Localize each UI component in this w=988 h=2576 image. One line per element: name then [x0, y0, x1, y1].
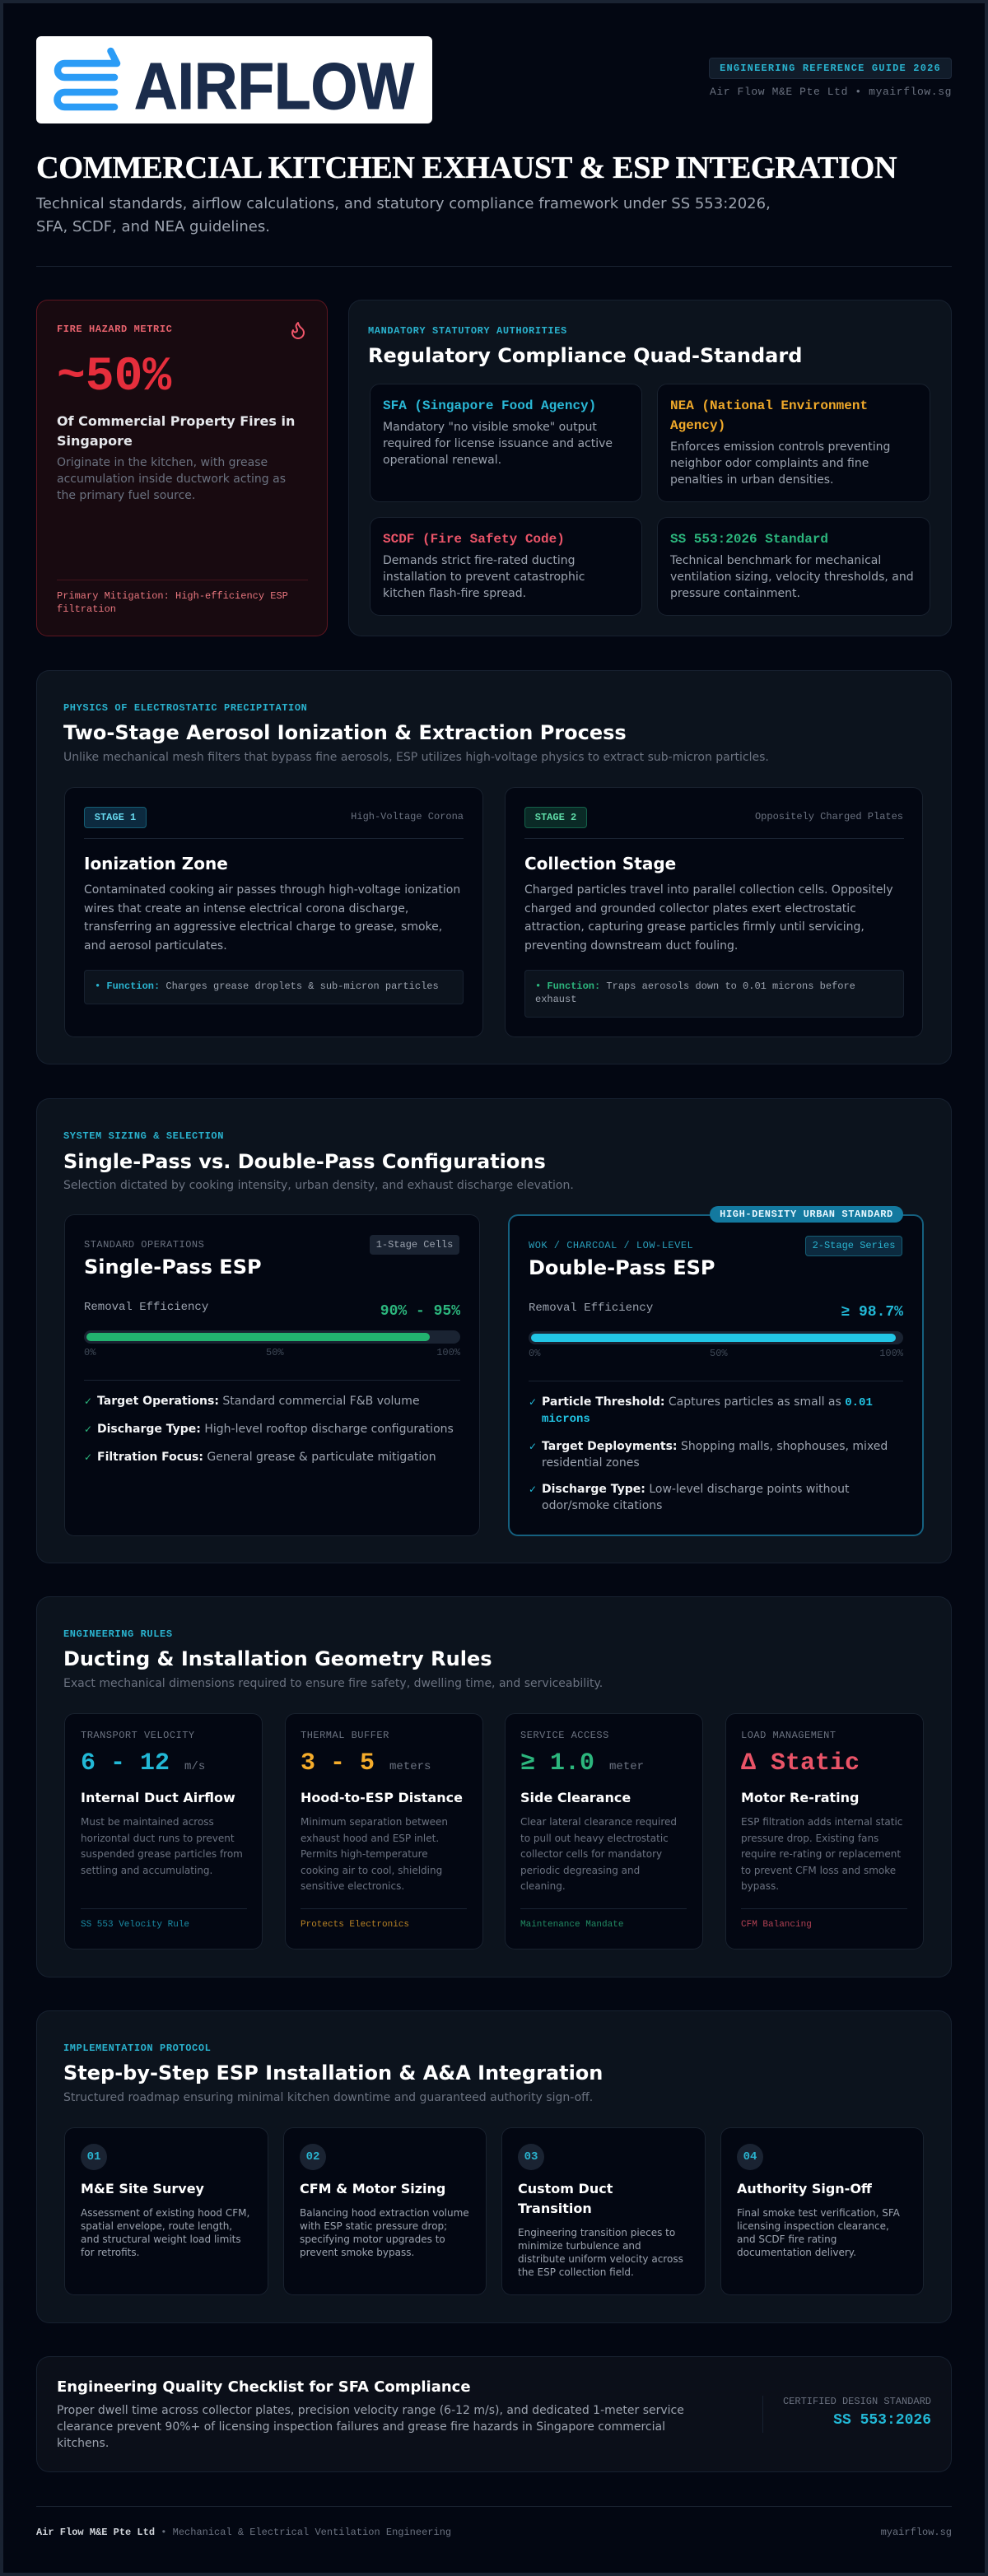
authority: NEA: penalties in urban densities. — [670, 473, 834, 487]
step 2: prevent smoke bypass. — [300, 2247, 414, 2258]
fire label: FIRE HAZARD METRIC — [57, 324, 172, 335]
badge — [370, 1235, 459, 1255]
efficiency bar — [529, 1331, 903, 1344]
rule: clearance: SERVICE ACCESS — [520, 1730, 609, 1741]
rule: motor: require re-rating or replacement — [741, 1848, 901, 1860]
big metric: ~50% — [57, 351, 171, 404]
rule: velocity — [64, 1713, 263, 1949]
section heading: Two-Stage Aerosol Ionization & Extraction Process — [63, 721, 627, 744]
rule: velocity: settling and accumulating. — [81, 1864, 212, 1875]
stage 2 card: preventing downstream duct fouling. — [524, 939, 738, 953]
step 1: Assessment of existing hood CFM, — [81, 2207, 249, 2219]
rule: motor: LOAD MANAGEMENT — [741, 1730, 837, 1741]
panel: single vs double pass — [36, 1098, 952, 1563]
pill — [710, 1206, 903, 1223]
rule: clearance: Side Clearance — [520, 1790, 631, 1805]
stage 2 card: • Function: Traps aerosols down to 0.01 microns before — [535, 981, 855, 992]
checklist text: clearance prevent 90%+ of licensing inspection failures and grease fire hazards in Singapore commercial — [57, 2420, 665, 2434]
single-pass card: 100% — [436, 1347, 460, 1358]
authority: NEA: Agency) — [670, 418, 725, 433]
checklist text — [57, 2404, 684, 2450]
stage 1 card: • Function: Charges grease droplets & sub-micron particles — [95, 981, 439, 992]
single-pass card — [64, 1214, 480, 1536]
authority: SFA: operational renewal. — [383, 454, 501, 467]
authority: SS 553: pressure containment. — [670, 587, 800, 600]
rule: velocity: horizontal duct runs to prevent — [81, 1833, 235, 1844]
section label: MANDATORY STATUTORY AUTHORITIES — [368, 325, 567, 337]
step 2: CFM & Motor Sizing — [300, 2181, 445, 2196]
badge: 1-Stage Cells — [376, 1239, 453, 1251]
rule: motor: pressure drop. Existing fans — [741, 1833, 878, 1844]
step 2 — [283, 2127, 487, 2295]
stage 1 card: transferring an aggressive electrical charge to grease, smoke, — [84, 920, 442, 934]
footer left: Air Flow M&E Pte Ltd • Mechanical & Electrical Ventilation Engineering — [36, 2527, 451, 2538]
double-pass card: Discharge Type: Low-level discharge points without — [542, 1483, 849, 1496]
icon: flame — [291, 322, 305, 339]
single-pass card: Single-Pass ESP — [84, 1255, 262, 1279]
double-pass card: Particle Threshold: Captures particles as small as 0.01 — [542, 1395, 873, 1409]
double-pass card: ✓ — [529, 1441, 537, 1452]
single-pass card: 90% - 95% — [380, 1303, 460, 1320]
double-pass card: 0% — [529, 1348, 540, 1359]
rule: motor: CFM Balancing — [741, 1920, 812, 1930]
rule: buffer: exhaust hood and ESP inlet. — [301, 1833, 439, 1844]
single-pass card: 0% — [84, 1347, 96, 1358]
stage 2 card: charged and grounded collector plates exert electrostatic — [524, 902, 856, 915]
rule: buffer: Hood-to-ESP Distance — [301, 1790, 463, 1805]
panel: quality checklist — [36, 2356, 952, 2472]
authority: SFA: SFA (Singapore Food Agency) — [383, 398, 596, 413]
feature list: ✓ — [529, 1396, 537, 1408]
section label: SYSTEM SIZING & SELECTION — [63, 1130, 224, 1142]
rule: motor: Δ Static — [741, 1749, 860, 1777]
authority: SS 553 — [657, 517, 930, 616]
header badge: ENGINEERING REFERENCE GUIDE 2026 — [720, 63, 941, 74]
header badge — [709, 58, 952, 79]
rule: velocity: Must be maintained across — [81, 1816, 214, 1828]
step 1: 01 — [87, 2150, 100, 2164]
authority: SFA: Mandatory "no visible smoke" output — [383, 421, 597, 434]
metric heading: Of Commercial Property Fires in — [57, 413, 295, 429]
double-pass card: Target Deployments: Shopping malls, shophouses, mixed — [542, 1440, 888, 1453]
step 4: 04 — [743, 2150, 757, 2164]
authority: SCDF: kitchen flash-fire spread. — [383, 587, 526, 600]
section heading: Ducting & Installation Geometry Rules — [63, 1647, 492, 1670]
panel: implementation steps — [36, 2010, 952, 2323]
rule: clearance: Maintenance Mandate — [520, 1920, 623, 1930]
mitigation note: filtration — [57, 603, 116, 615]
badge — [805, 1236, 902, 1256]
rule: clearance: to pull out heavy electrostatic — [520, 1833, 669, 1844]
authority: NEA: neighbor odor complaints and fine — [670, 457, 869, 470]
double-pass card: microns — [542, 1413, 590, 1426]
step 1: spatial envelope, route length, — [81, 2220, 232, 2232]
stage 1 card: and aerosol particulates. — [84, 939, 227, 953]
step 4: documentation delivery. — [737, 2247, 856, 2258]
step 4: licensing inspection clearance, — [737, 2220, 889, 2232]
stage 2 card: Oppositely Charged Plates — [755, 811, 903, 822]
footer right: myairflow.sg — [881, 2527, 952, 2538]
stage 2 card: Charged particles travel into parallel collection cells. Oppositely — [524, 883, 893, 897]
section label: ENGINEERING RULES — [63, 1628, 173, 1640]
rule: velocity: 6 - 12 m/s — [81, 1749, 205, 1777]
stage 1 card: Contaminated cooking air passes through high-voltage ionization — [84, 883, 460, 897]
header company line: Air Flow M&E Pte Ltd • myairflow.sg — [710, 86, 952, 98]
double-pass card: Double-Pass ESP — [529, 1256, 715, 1279]
authority: SCDF: Demands strict fire-rated ducting — [383, 554, 575, 567]
stage 2 card: Collection Stage — [524, 854, 676, 873]
double-pass card: odor/smoke citations — [542, 1499, 662, 1512]
pill: HIGH-DENSITY URBAN STANDARD — [720, 1209, 893, 1220]
rule: clearance: collector cells for mandatory — [520, 1848, 662, 1860]
panel: regulatory compliance — [348, 300, 952, 636]
rule: velocity: suspended grease particles from — [81, 1848, 243, 1860]
step 1 — [64, 2127, 268, 2295]
checklist text: kitchens. — [57, 2437, 109, 2450]
rule: buffer: cooking air to cool, shielding — [301, 1864, 442, 1875]
authority: SCDF: SCDF (Fire Safety Code) — [383, 532, 565, 547]
step 3: minimize turbulence and — [518, 2240, 641, 2252]
stage 1 card — [64, 787, 483, 1037]
step 3: Transition — [518, 2201, 592, 2216]
double-pass card: 50% — [710, 1348, 728, 1359]
step 4 — [720, 2127, 924, 2295]
rule: motor: Motor Re-rating — [741, 1790, 860, 1805]
section description: Structured roadmap ensuring minimal kitchen downtime and guaranteed authority sign-off. — [63, 2091, 593, 2104]
single-pass card: 50% — [266, 1347, 284, 1358]
single-pass card: ✓ — [84, 1423, 92, 1435]
stage 2 card: exhaust — [535, 994, 576, 1005]
step 1: and structural weight load limits — [81, 2234, 241, 2245]
rule: clearance: periodic degreasing and — [520, 1864, 640, 1875]
step 3: 03 — [524, 2150, 538, 2164]
step 4: and SCDF fire rating — [737, 2234, 837, 2245]
double-pass card: Removal Efficiency — [529, 1302, 653, 1315]
subtitle: SFA, SCDF, and NEA guidelines. — [36, 218, 270, 235]
rule: buffer: THERMAL BUFFER — [301, 1730, 389, 1741]
step 4: Final smoke test verification, SFA — [737, 2207, 900, 2219]
double-pass card: residential zones — [542, 1456, 640, 1470]
rule: buffer — [285, 1713, 483, 1949]
subtitle — [36, 195, 771, 235]
single-pass card: ✓ — [84, 1451, 92, 1463]
step 4: Authority Sign-Off — [737, 2181, 872, 2196]
section label: PHYSICS OF ELECTROSTATIC PRECIPITATION — [63, 702, 307, 714]
efficiency bar — [84, 1330, 460, 1344]
stage 2 card: attraction, capturing grease particles firmly until servicing, — [524, 920, 864, 934]
double-pass card — [508, 1214, 924, 1536]
rule: motor — [725, 1713, 924, 1949]
single-pass card: Discharge Type: High-level rooftop discharge configurations — [97, 1423, 454, 1436]
step 3 — [501, 2127, 706, 2295]
section description: Selection dictated by cooking intensity, urban density, and exhaust discharge elevation. — [63, 1179, 574, 1192]
step 2: Balancing hood extraction volume — [300, 2207, 469, 2219]
double-pass card: ≥ 98.7% — [841, 1304, 903, 1321]
section label: IMPLEMENTATION PROTOCOL — [63, 2043, 211, 2054]
stage 1 card: High-Voltage Corona — [351, 811, 464, 822]
step 2: specifying motor upgrades to — [300, 2234, 445, 2245]
rule: velocity: SS 553 Velocity Rule — [81, 1920, 189, 1930]
metric description — [57, 456, 286, 502]
rule: velocity: TRANSPORT VELOCITY — [81, 1730, 195, 1741]
stage 1 card: Ionization Zone — [84, 854, 228, 873]
stage 1 card: wires that create an intense electrical corona discharge, — [84, 902, 408, 915]
step 2: 02 — [306, 2150, 319, 2164]
single-pass card: Removal Efficiency — [84, 1301, 208, 1314]
feature list: ✓ — [84, 1395, 92, 1407]
step 3: distribute uniform velocity across — [518, 2253, 683, 2265]
badge: 2-Stage Series — [813, 1240, 895, 1251]
rule: buffer: Permits high-temperature — [301, 1848, 428, 1860]
mitigation note — [57, 590, 288, 615]
logo — [36, 36, 432, 123]
authority: NEA: NEA (National Environment — [670, 398, 868, 413]
authority: SCDF — [370, 517, 642, 616]
metric description: accumulation inside ductwork acting as — [57, 473, 286, 486]
section heading: Step-by-Step ESP Installation & A&A Integration — [63, 2061, 603, 2085]
rule: buffer: sensitive electronics. — [301, 1880, 404, 1892]
double-pass card: 100% — [879, 1348, 903, 1359]
rule: buffer: Minimum separation between — [301, 1816, 448, 1828]
authority: SS 553: ventilation sizing, velocity thresholds, and — [670, 571, 914, 584]
metric description: Originate in the kitchen, with grease — [57, 456, 268, 469]
rule: buffer: Protects Electronics — [301, 1920, 409, 1930]
authority: SCDF: installation to prevent catastrophic — [383, 571, 585, 584]
rule: clearance: Clear lateral clearance required — [520, 1816, 677, 1828]
double-pass card: ✓ — [529, 1484, 537, 1495]
authority: SFA: required for license issuance and active — [383, 437, 613, 450]
panel: two-stage process — [36, 670, 952, 1064]
title: COMMERCIAL KITCHEN EXHAUST & ESP INTEGRATION — [36, 151, 897, 185]
section heading: Single-Pass vs. Double-Pass Configurations — [63, 1150, 546, 1173]
rule: clearance — [505, 1713, 703, 1949]
section description: Exact mechanical dimensions required to ensure fire safety, dwelling time, and serviceability. — [63, 1677, 603, 1690]
metric heading: Singapore — [57, 433, 133, 449]
authority: SFA — [370, 384, 642, 502]
step 3: the ESP collection field. — [518, 2266, 634, 2278]
rule: velocity: Internal Duct Airflow — [81, 1790, 235, 1805]
checklist heading: Engineering Quality Checklist for SFA Compliance — [57, 2378, 471, 2396]
rule: clearance: ≥ 1.0 meter — [520, 1749, 644, 1777]
rule: motor: bypass. — [741, 1880, 779, 1892]
panel: quality checklist: SS 553:2026 — [833, 2412, 931, 2429]
double-pass card: WOK / CHARCOAL / LOW-LEVEL — [529, 1240, 693, 1251]
rule: buffer: 3 - 5 meters — [301, 1749, 431, 1777]
authority: SS 553: Technical benchmark for mechanical — [670, 554, 881, 567]
section description: Unlike mechanical mesh filters that bypass fine aerosols, ESP utilizes high-voltage physics to extract sub-micron particles. — [63, 751, 769, 764]
panel: fire hazard metric — [36, 300, 328, 636]
single-pass card: Filtration Focus: General grease & particulate mitigation — [97, 1451, 436, 1464]
single-pass card: STANDARD OPERATIONS — [84, 1239, 204, 1251]
subtitle: Technical standards, airflow calculations, and statutory compliance framework under SS 553:2026, — [36, 195, 771, 212]
step 1: M&E Site Survey — [81, 2181, 204, 2196]
step 2: with ESP static pressure drop; — [300, 2220, 447, 2232]
rule: motor: to prevent CFM loss and smoke — [741, 1864, 896, 1875]
stage 2 card: STAGE 2 — [535, 812, 576, 823]
rule: clearance: cleaning. — [520, 1880, 566, 1892]
certified standard: CERTIFIED DESIGN STANDARD — [783, 2396, 931, 2407]
authority: NEA — [657, 384, 930, 502]
authority: SS 553: SS 553:2026 Standard — [670, 532, 828, 547]
stage 1 card: STAGE 1 — [95, 812, 136, 823]
checklist text: Proper dwell time across collector plates, precision velocity range (6-12 m/s), and dedicated 1-meter service — [57, 2404, 684, 2417]
step 3: Custom Duct — [518, 2181, 613, 2196]
single-pass card: Target Operations: Standard commercial F&B volume — [97, 1395, 420, 1408]
metric description: the primary fuel source. — [57, 489, 195, 502]
panel: ducting rules — [36, 1596, 952, 1977]
stage 2 card — [505, 787, 923, 1037]
metric heading — [57, 413, 295, 449]
section heading: Regulatory Compliance Quad-Standard — [368, 344, 802, 367]
rule: motor: ESP filtration adds internal static — [741, 1816, 902, 1828]
authority: NEA: Enforces emission controls preventing — [670, 440, 890, 454]
step 1: for retrofits. — [81, 2247, 139, 2258]
mitigation note: Primary Mitigation: High-efficiency ESP — [57, 590, 288, 602]
step 3: Engineering transition pieces to — [518, 2227, 675, 2238]
